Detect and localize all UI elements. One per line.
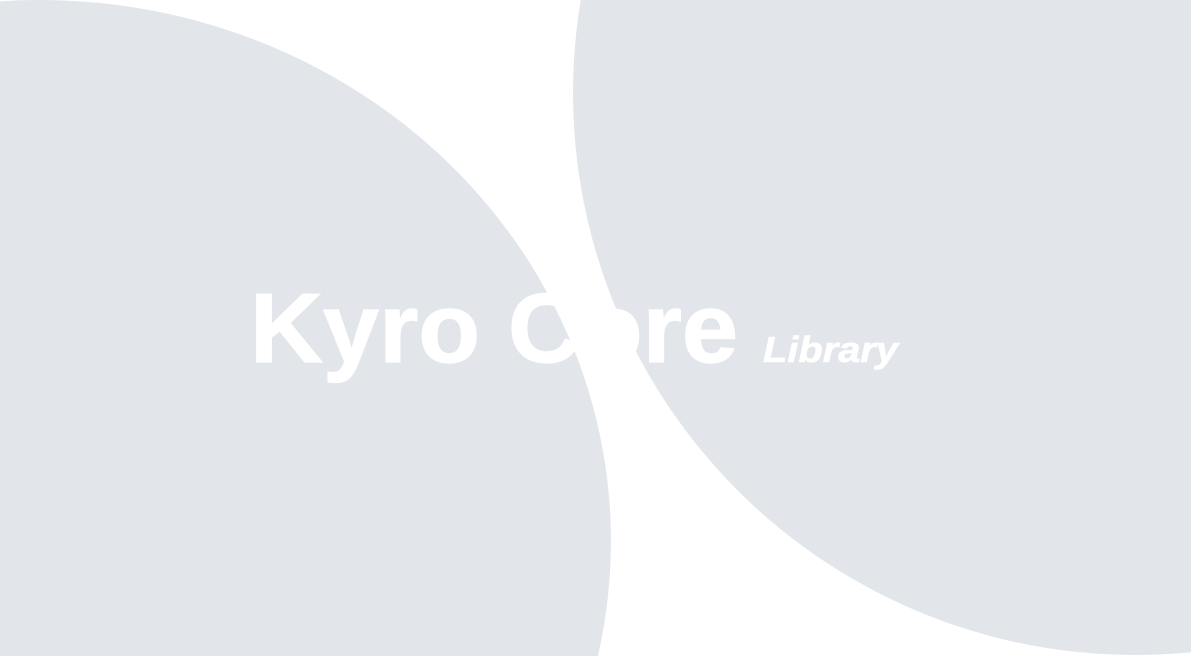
left background shape [0, 0, 611, 656]
title [250, 273, 900, 383]
title text: Kyro Core: Kyro Core [250, 273, 738, 383]
right background shape [573, 0, 1191, 655]
subtitle text: Library: Library [763, 329, 900, 370]
